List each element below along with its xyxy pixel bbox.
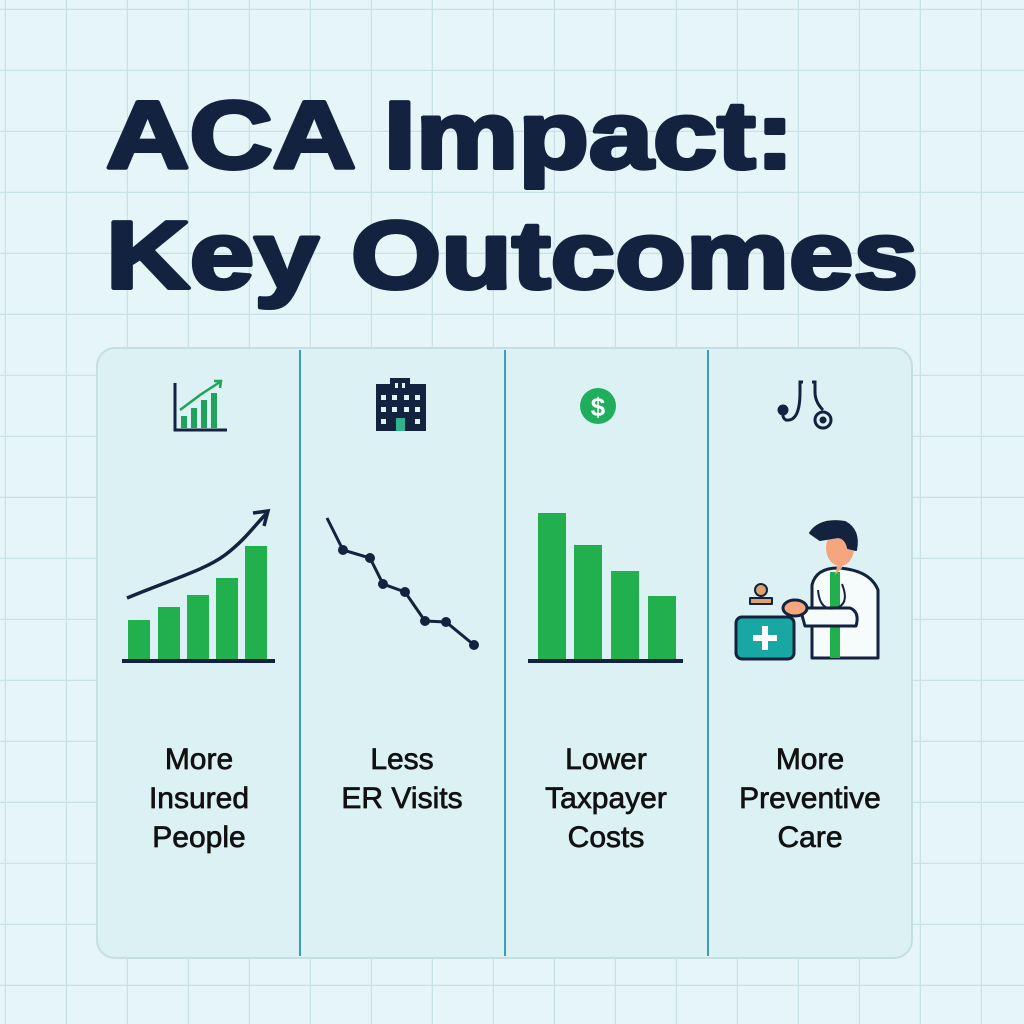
label: lower taxpayer costs: Costs [568,821,644,854]
illustration: doctor [736,521,878,659]
label: more insured people: More [165,743,233,776]
label: lower taxpayer costs: Lower [565,743,647,776]
label: more preventive care: Care [777,821,843,854]
label: more insured people: People [152,821,246,854]
title [106,82,918,309]
panel: outcomes [97,348,912,958]
chart: more insured [122,511,275,661]
icon: hospital [376,378,426,431]
label: less ER visits [341,743,463,815]
chart: lower costs [528,513,683,661]
icon: stethoscope [779,382,831,428]
icon: dollar [580,388,616,424]
label: less ER visits: Less [370,743,434,776]
label: more insured people: Insured [149,782,249,815]
title: ACA Impact: [106,82,794,189]
chart: ER visits declining [327,518,478,648]
label: lower taxpayer costs: Taxpayer [545,782,667,815]
icon: dollar: $ [591,392,606,422]
label: more preventive care: Preventive [739,782,881,815]
title: Key Outcomes [106,202,918,309]
label: more insured people [149,743,249,854]
label: lower taxpayer costs [545,743,667,854]
label: more preventive care [739,743,881,854]
icon: growth chart [175,381,227,430]
label: more preventive care: More [776,743,844,776]
label: less ER visits: ER Visits [341,782,463,815]
